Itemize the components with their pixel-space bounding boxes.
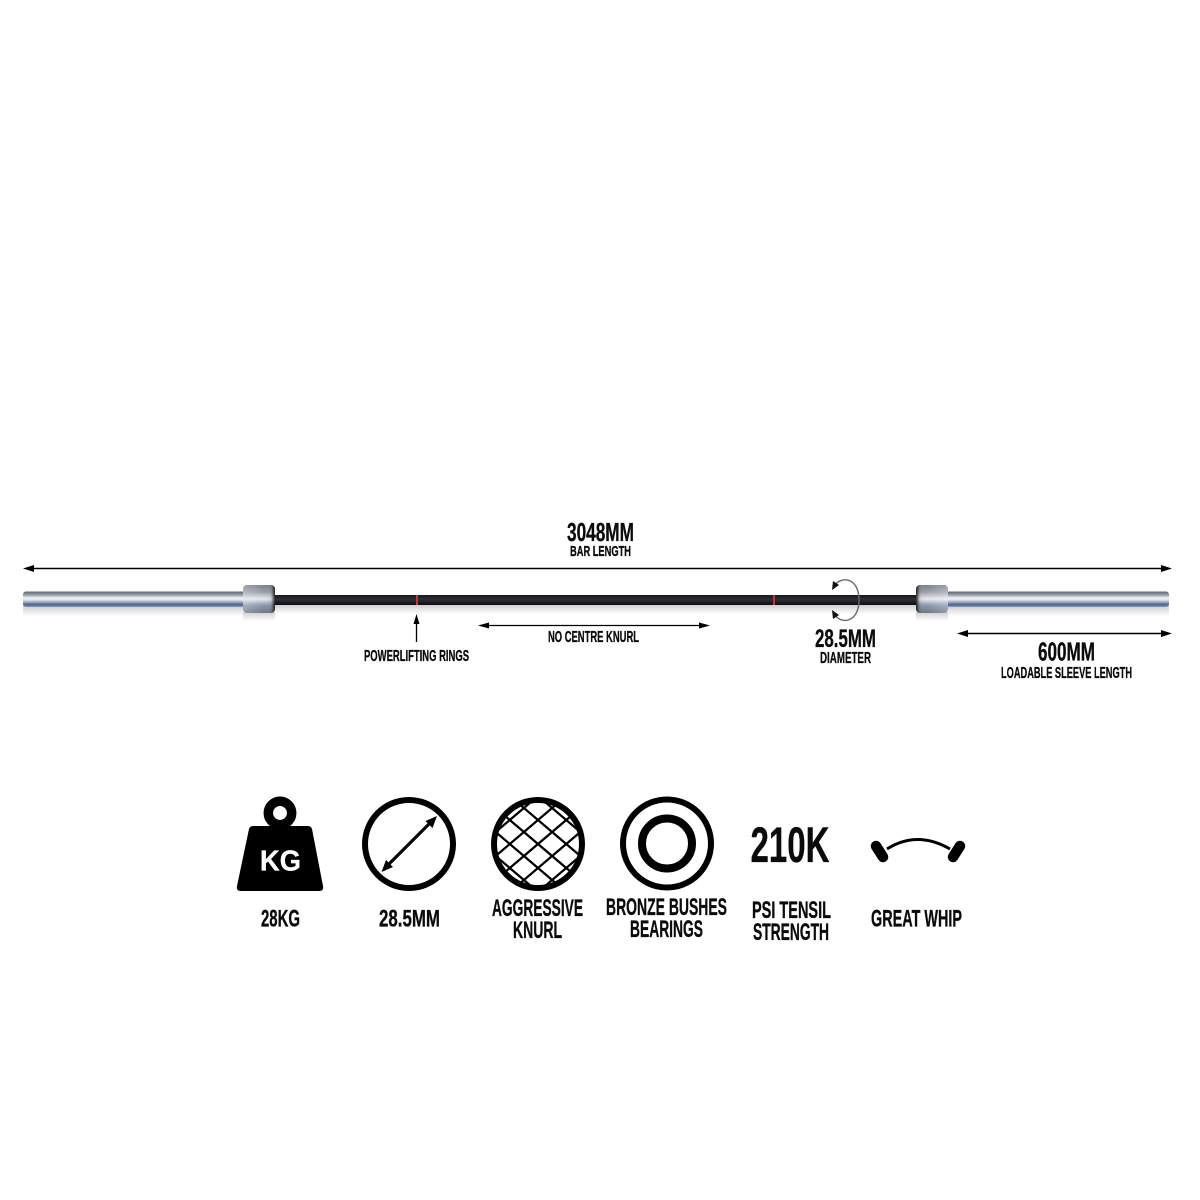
left powerlifting ring — [416, 595, 418, 605]
left sleeve — [23, 592, 245, 607]
label: psi tensil strength: PSI TENSIL — [752, 897, 831, 924]
caption: bar length: BAR LENGTH — [570, 544, 631, 560]
label: aggressive knurl: KNURL — [513, 917, 562, 944]
icon: bending bar — [876, 840, 960, 857]
caption: powerlifting rings: POWERLIFTING RINGS — [364, 648, 469, 665]
right sleeve — [946, 592, 1169, 607]
label: aggressive knurl — [492, 895, 583, 944]
value: 210K: 210K — [750, 817, 830, 873]
bar shaft — [272, 595, 920, 605]
spec: knurl — [491, 797, 585, 938]
barbell — [23, 585, 1169, 621]
value: 600MM: 600MM — [1038, 638, 1095, 666]
spec: diameter — [365, 800, 453, 932]
caption: diameter: DIAMETER — [820, 650, 871, 667]
label: great whip: GREAT WHIP — [871, 906, 962, 932]
label: psi tensil strength: STRENGTH — [753, 919, 829, 946]
spec: tensile strength — [750, 817, 831, 946]
icon: diameter circle — [365, 800, 453, 888]
icon: rotation arc — [834, 580, 859, 620]
callout: diameter — [815, 580, 876, 667]
label: bronze bushes bearings: BEARINGS — [630, 916, 703, 943]
arrow: up to ring — [416, 622, 418, 642]
caption: no centre knurl: NO CENTRE KNURL — [548, 629, 639, 646]
label: aggressive knurl: AGGRESSIVE — [492, 895, 583, 922]
spec: whip — [871, 840, 962, 932]
right powerlifting ring — [773, 595, 775, 605]
value: 28.5MM: 28.5MM — [815, 625, 876, 653]
label: bronze bushes bearings: BRONZE BUSHES — [606, 894, 727, 921]
infographic canvas — [23, 522, 1172, 940]
arrow: knurl span — [488, 624, 700, 626]
icon: kettle weight: KG — [260, 846, 301, 878]
callout: loadable sleeve length — [957, 630, 1172, 682]
left collar — [243, 585, 275, 613]
bar reflection — [23, 605, 1169, 621]
spec: bearings — [606, 800, 727, 943]
arrow: sleeve span — [967, 632, 1162, 634]
right collar — [916, 585, 948, 613]
icon: bushing rings — [623, 800, 711, 888]
spec: weight — [237, 801, 323, 932]
value: 3048MM: 3048MM — [567, 517, 634, 547]
icon: knurl mesh — [491, 797, 585, 891]
arrow: bar length — [33, 568, 1162, 570]
label: 28.5MM: 28.5MM — [379, 906, 440, 932]
dimension: bar length — [23, 517, 1172, 572]
label: 28KG: 28KG — [261, 906, 300, 932]
label: psi tensil strength — [752, 897, 831, 946]
callout: powerlifting rings — [364, 614, 469, 665]
callout: no centre knurl — [478, 622, 710, 646]
label: bronze bushes bearings — [606, 894, 727, 943]
